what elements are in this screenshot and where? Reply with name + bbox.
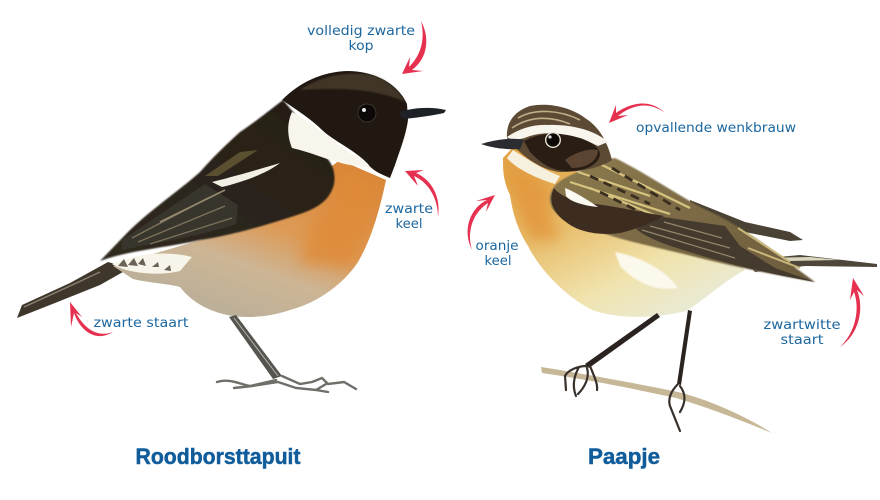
cap streaks [512, 111, 580, 128]
arrow: zwarte staart [70, 302, 113, 336]
bird: Paapje illustration [481, 105, 877, 433]
eye [358, 104, 376, 122]
head [507, 105, 612, 172]
label: oranje keel: keel [484, 254, 512, 269]
label: volledig zwarte kop: volledig zwarte [307, 24, 415, 39]
back and wing [550, 158, 815, 282]
feet [565, 366, 684, 431]
label: zwarte staart: zwarte staart [94, 316, 188, 331]
wing and back [100, 100, 334, 261]
arrow: opvallende wenkbrauw [609, 104, 665, 123]
bird: Roodborsttapuit illustration [17, 71, 446, 392]
dark mask [524, 134, 600, 171]
branch [541, 367, 772, 433]
white collar [288, 112, 372, 168]
belly and breast [113, 160, 386, 317]
white flank [615, 252, 678, 289]
toes [217, 376, 356, 392]
white wing patch [565, 188, 598, 207]
label: zwarte keel: keel [396, 217, 422, 232]
label: oranje keel: oranje [476, 239, 518, 254]
tail [17, 262, 130, 318]
tail [745, 255, 877, 272]
arrow: volledig zwarte kop [402, 21, 426, 74]
head [282, 71, 408, 178]
wing primaries [122, 184, 238, 250]
legs [585, 310, 692, 385]
arrow: zwartwitte staart [840, 278, 864, 347]
label: volledig zwarte kop: kop [348, 39, 374, 54]
arrow: zwarte keel [405, 170, 439, 217]
label: zwartwitte staart: zwartwitte [764, 318, 840, 333]
primaries [636, 217, 815, 282]
eye [545, 132, 561, 148]
belly and breast [503, 140, 745, 317]
white wing patch [212, 163, 280, 187]
label: zwartwitte staart: staart [780, 333, 824, 348]
title: Paapje: Paapje [588, 444, 660, 469]
back stripes [570, 164, 690, 226]
beak [481, 139, 524, 149]
label: opvallende wenkbrauw: opvallende wenkbrauw [636, 121, 796, 136]
arrow: oranje keel [468, 195, 495, 250]
white rump [112, 253, 192, 274]
white throat line [507, 150, 560, 184]
wing stripes [738, 228, 800, 268]
dark shoulder patch [551, 188, 664, 234]
wing olive streaks [205, 150, 258, 176]
beak [399, 108, 446, 119]
title: Roodborsttapuit: Roodborsttapuit [136, 444, 301, 469]
white eyebrow [507, 125, 608, 146]
label: zwarte keel: zwarte [385, 202, 433, 217]
legs [229, 315, 282, 379]
upper wing feathers [690, 200, 803, 241]
